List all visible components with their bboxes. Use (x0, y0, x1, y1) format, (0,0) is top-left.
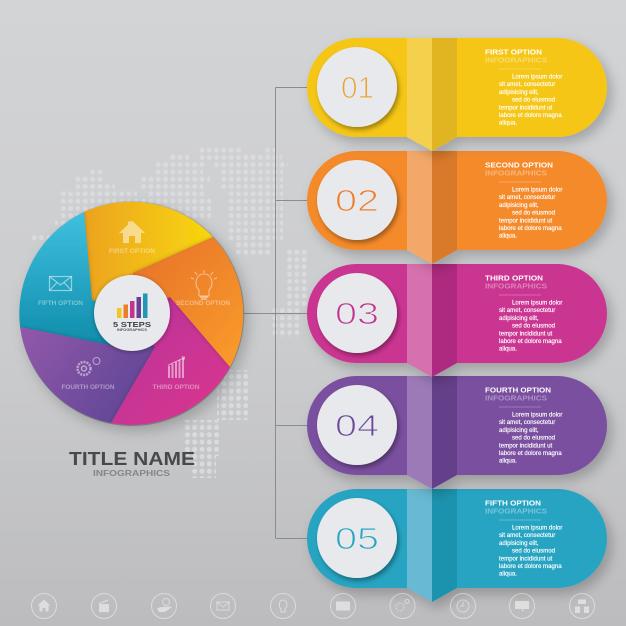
icon: hand and clock (152, 594, 176, 618)
center badge (94, 275, 170, 351)
step 3 panel (307, 264, 607, 377)
option text: sed do eiusmod (512, 323, 555, 330)
option text: INFOGRAPHICS (485, 284, 547, 290)
option text: INFOGRAPHICS (485, 508, 547, 516)
badge bar chart (117, 294, 148, 318)
option text: tempor incididunt ut (499, 555, 552, 562)
number badge (317, 273, 397, 353)
option text: INFOGRAPHICS (485, 170, 547, 178)
option text: labore et dolore magna (499, 450, 562, 457)
icon: gears (78, 358, 100, 375)
step 5 panel (307, 489, 607, 602)
option text (485, 276, 562, 353)
option text: sit amet, consectetur (499, 81, 555, 88)
icon: mail (210, 594, 236, 618)
icon: light bulb (191, 270, 217, 299)
icon: gears (390, 594, 415, 618)
pill shape (307, 151, 607, 264)
option text: sit amet, consectetur (499, 532, 555, 539)
step 1 panel (307, 38, 607, 151)
option text: aliqua. (499, 233, 517, 240)
icon: chart (92, 594, 116, 618)
option text: SECOND OPTION (485, 162, 553, 170)
option text: labore et dolore magna (499, 225, 562, 232)
bottom icon row (32, 594, 594, 618)
label: fifth option: FIFTH OPTION (38, 301, 83, 307)
option text (485, 500, 562, 578)
option text: tempor incididunt ut (499, 104, 552, 111)
number badge (317, 160, 397, 240)
option text: adipisicing elit, (499, 202, 539, 209)
number badge: 05 (335, 521, 379, 556)
pill shape (307, 264, 607, 377)
option text (485, 50, 562, 127)
option text: tempor incididunt ut (499, 330, 552, 337)
icon: speech bubble (510, 594, 534, 618)
icon: home (32, 594, 56, 618)
option text: Lorem ipsum dolor (512, 524, 562, 532)
pill shape (307, 489, 607, 602)
subtitle: INFOGRAPHICS (93, 469, 171, 478)
dotted world map (30, 146, 307, 478)
option text: adipisicing elit, (499, 89, 539, 96)
option text: Lorem ipsum dolor (512, 186, 562, 194)
option text: adipisicing elit, (499, 427, 539, 434)
option text: FOURTH OPTION (485, 388, 551, 394)
number badge: 04 (335, 408, 379, 443)
badge heading: 5 STEPS (113, 320, 151, 329)
pill shape (307, 38, 607, 151)
option text: labore et dolore magna (499, 112, 562, 119)
connector lines (244, 88, 308, 538)
option text: aliqua. (499, 346, 517, 353)
option text: FIFTH OPTION (485, 500, 541, 508)
label: fourth option: FOURTH OPTION (62, 385, 114, 391)
number badge (317, 385, 397, 465)
slice: fifth option (19, 212, 110, 345)
option text (485, 162, 562, 240)
option text: sed do eiusmod (512, 210, 555, 217)
number badge: 02 (335, 183, 379, 218)
slice: second option (132, 237, 243, 367)
option text: sit amet, consectetur (499, 419, 555, 426)
icon: clock (450, 594, 476, 618)
option text: sed do eiusmod (512, 97, 555, 104)
label: first option: FIRST OPTION (109, 249, 155, 255)
number badge: 03 (335, 296, 379, 331)
icon: network (570, 594, 594, 618)
icon: bulb (270, 594, 296, 618)
option text: sit amet, consectetur (499, 194, 555, 201)
slice: first option (84, 202, 213, 313)
option text: labore et dolore magna (499, 563, 562, 570)
option text: labore et dolore magna (499, 338, 562, 345)
title: TITLE NAME (69, 449, 195, 469)
option text: adipisicing elit, (499, 315, 539, 322)
option text: FIRST OPTION (485, 50, 542, 56)
label: second option: SECOND OPTION (176, 301, 230, 307)
option text: INFOGRAPHICS (485, 396, 547, 402)
option text: sit amet, consectetur (499, 307, 555, 314)
option text: Lorem ipsum dolor (512, 412, 562, 418)
step 2 panel (307, 151, 607, 264)
pill shape (307, 376, 607, 489)
option text: THIRD OPTION (485, 276, 543, 282)
option text: Lorem ipsum dolor (512, 300, 562, 306)
label: third option: THIRD OPTION (152, 385, 200, 391)
badge subheading: INFOGRAPHICS (117, 328, 148, 332)
option text: adipisicing elit, (499, 540, 539, 547)
number badge: 01 (341, 70, 374, 105)
icon: house (119, 220, 145, 243)
option text: INFOGRAPHICS (485, 58, 547, 64)
option text: aliqua. (499, 571, 517, 578)
option text (485, 388, 562, 465)
option text: aliqua. (499, 458, 517, 465)
option text: sed do eiusmod (512, 435, 555, 442)
option text: tempor incididunt ut (499, 217, 552, 224)
icon: envelope (50, 276, 72, 290)
icon: money (330, 594, 356, 618)
step 4 panel (307, 376, 607, 489)
slice: third option (111, 297, 230, 425)
option text: aliqua. (499, 120, 517, 127)
option text: Lorem ipsum dolor (512, 74, 562, 80)
number badge (317, 498, 397, 578)
pie chart (19, 202, 244, 426)
slice: fourth option (20, 326, 155, 424)
icon: chart arrow (168, 356, 185, 378)
option text: tempor incididunt ut (499, 442, 552, 449)
number badge (317, 47, 397, 127)
option text: sed do eiusmod (512, 548, 555, 555)
